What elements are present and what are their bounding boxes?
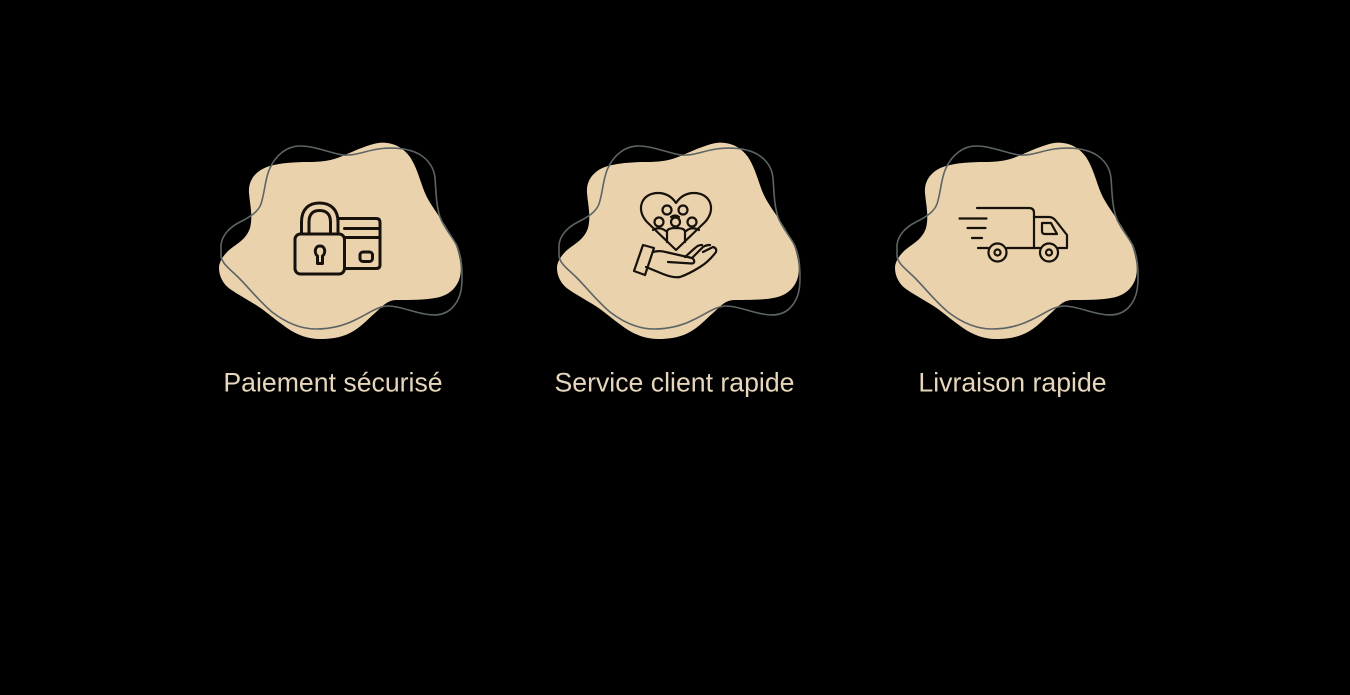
- icon: padlock and credit card: [295, 203, 380, 274]
- feature: secure payment: [219, 143, 462, 398]
- blob outline: [897, 146, 1138, 329]
- icon: heart with people above a hand: [634, 193, 716, 277]
- feature: fast delivery: [895, 143, 1138, 398]
- label: Paiement sécurisé: [223, 368, 443, 398]
- blob background: [219, 143, 461, 339]
- blob outline: [559, 146, 800, 329]
- label: Service client rapide: [554, 368, 795, 398]
- feature: fast customer service: [554, 143, 800, 398]
- blob outline: [221, 146, 462, 329]
- label: Livraison rapide: [918, 368, 1107, 398]
- icon: delivery truck: [960, 208, 1067, 262]
- blob background: [895, 143, 1137, 339]
- blob background: [557, 143, 799, 339]
